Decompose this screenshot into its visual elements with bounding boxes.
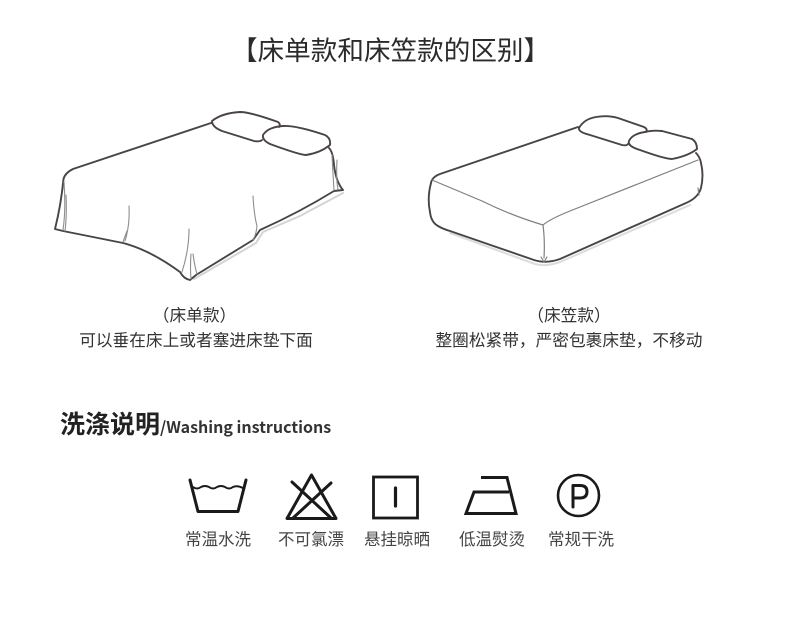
icon: no bleach xyxy=(287,475,336,518)
text: fitted sheet caption: （床笠款） xyxy=(527,306,611,325)
mattress shadow xyxy=(450,205,690,265)
icon: dry clean P xyxy=(558,475,599,516)
text: fitted sheet caption xyxy=(436,306,702,350)
fitted pillow right xyxy=(629,131,697,159)
label: normal temperature wash: 常温水洗 xyxy=(185,531,251,549)
text: fitted sheet caption: 整圈松紧带，严密包裹床垫，不移动 xyxy=(436,331,702,350)
title: 【床单款和床笠款的区别】 xyxy=(231,36,550,66)
text: flat sheet caption xyxy=(79,306,313,350)
text: flat sheet caption: 可以垂在床上或者塞进床垫下面 xyxy=(79,331,313,350)
label: hang dry: 悬挂晾晒 xyxy=(364,531,430,549)
illustration: fitted sheet bed xyxy=(429,116,702,265)
text: flat sheet caption: （床单款） xyxy=(153,306,236,325)
icon: wash basin xyxy=(190,480,246,512)
heading: washing instructions: 洗涤说明/Washing instructions xyxy=(60,405,331,441)
fitted sheet seams xyxy=(432,160,699,262)
fitted pillow left xyxy=(579,116,647,145)
sheet shadow xyxy=(194,193,343,279)
label: low temperature iron: 低温熨烫 xyxy=(459,531,525,549)
pillow left xyxy=(212,112,280,141)
icon: low temperature iron xyxy=(466,478,516,514)
icon: hang dry xyxy=(374,477,418,518)
label: regular dry clean: 常规干洗 xyxy=(548,531,614,549)
sheet folds xyxy=(63,155,338,279)
fitted sheet outline xyxy=(429,127,702,262)
sheet outline xyxy=(55,123,343,280)
pillow right xyxy=(263,126,330,155)
label: no bleach: 不可氯漂 xyxy=(278,531,344,549)
